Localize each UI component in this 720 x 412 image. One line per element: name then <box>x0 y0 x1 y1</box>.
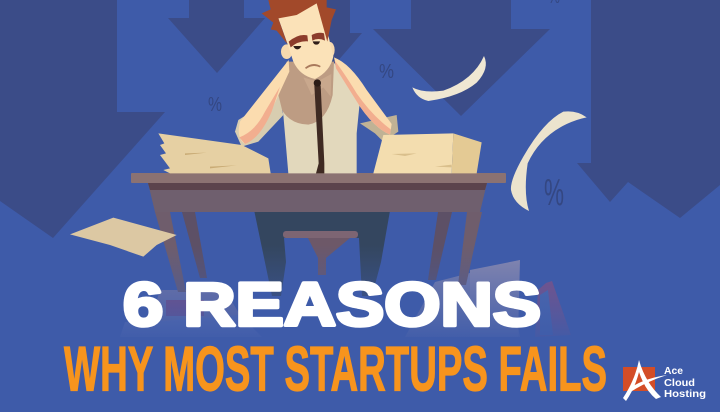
shirt <box>278 62 360 173</box>
desk top <box>131 173 506 183</box>
left outer leg <box>155 212 186 292</box>
left arm pink stripe <box>239 87 280 144</box>
faded books under the desk <box>120 260 571 337</box>
logo red square <box>623 367 655 391</box>
left inner leg <box>182 212 207 278</box>
arrow: large right <box>577 0 720 218</box>
title: 6 REASONS: 6 REASONS <box>123 270 541 338</box>
desk shadow band <box>148 183 487 190</box>
tie knot <box>314 79 321 87</box>
percent sign left: % <box>208 94 222 116</box>
arrow: top centre <box>373 0 550 116</box>
right shirt sleeve <box>360 115 398 142</box>
percent sign centre: % <box>379 61 394 83</box>
desk under panel <box>148 183 487 212</box>
arrow: small top left <box>168 0 265 73</box>
floating paper centre <box>412 56 486 101</box>
left shirt sleeve <box>235 95 283 147</box>
faded book pile left <box>120 290 262 337</box>
ears <box>281 42 335 59</box>
left arm <box>239 60 289 144</box>
logo swoosh <box>630 375 667 391</box>
logo wordmark <box>664 366 706 400</box>
faded binders <box>535 281 571 337</box>
percent sign lower right: % <box>544 172 564 214</box>
background down arrows <box>0 0 720 238</box>
word: Ace: Ace <box>664 366 683 377</box>
tie <box>314 85 324 173</box>
right arm <box>334 57 392 135</box>
eyebrows <box>289 33 325 47</box>
left paper stack <box>158 133 271 173</box>
right inner leg <box>428 212 452 280</box>
logo white A mark <box>623 360 661 401</box>
right paper stack <box>373 133 482 173</box>
man and paper stacks <box>158 0 482 173</box>
floating paper right <box>511 111 587 211</box>
collar <box>303 74 331 97</box>
neck and chest shadow <box>278 62 334 125</box>
hair <box>262 0 336 44</box>
desk with legs <box>131 173 506 296</box>
word: Cloud: Cloud <box>664 378 695 389</box>
right outer leg <box>458 212 482 285</box>
stool <box>283 231 358 275</box>
arrow: large left <box>0 0 165 238</box>
right arm pink stripe <box>335 61 391 135</box>
logo: Ace Cloud Hosting <box>623 360 706 401</box>
eyes and mouth <box>293 41 321 69</box>
fade over lower furniture <box>110 245 590 340</box>
word: Hosting: Hosting <box>664 389 706 400</box>
percent signs <box>208 0 564 214</box>
faded paper stack right <box>405 260 520 337</box>
face <box>278 3 333 79</box>
floating paper left <box>70 218 177 257</box>
man's trousers <box>253 205 391 296</box>
arrow: behind head <box>298 0 362 70</box>
